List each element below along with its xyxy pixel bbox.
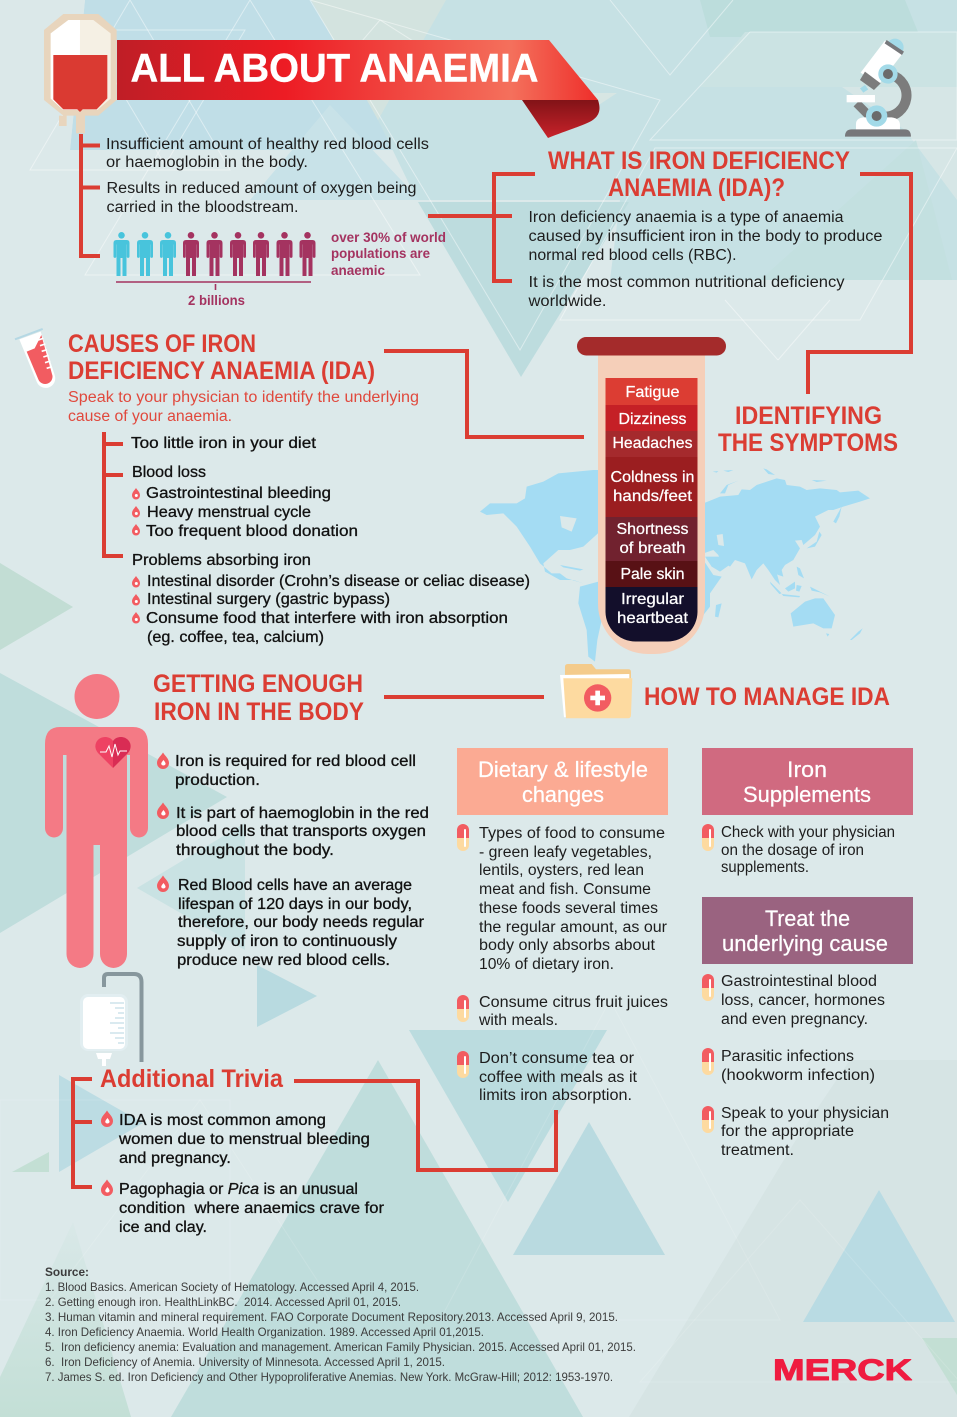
test tube of symptoms: Irregular [621, 591, 685, 608]
section: causes heading: Speak to your physician to identify the underlying [68, 389, 419, 406]
iron facts: throughout the body. [176, 842, 334, 859]
panel: dietary and lifestyle changes: 10% of dietary iron. [479, 956, 614, 973]
sources: 2. Getting enough iron. HealthLinkBC. 2014. Accessed April 01, 2015. [45, 1295, 401, 1309]
panel: dietary and lifestyle changes: the regular amount, as our [479, 919, 667, 936]
causes list: Too little iron in your diet [131, 435, 317, 452]
causes list [104, 432, 530, 646]
panel: iron supplements: supplements. [721, 859, 809, 876]
sources: 6. Iron Deficiency of Anemia. University of Minnesota. Accessed April 1, 2015. [45, 1355, 445, 1369]
test tube of symptoms: Coldness in [610, 469, 694, 486]
test tube of symptoms: hands/feet [613, 488, 693, 505]
iron facts: It is part of haemoglobin in the red [176, 805, 429, 822]
causes list: Heavy menstrual cycle [147, 504, 311, 521]
section: what is IDA [428, 147, 911, 394]
heading: identifying the symptoms: THE SYMPTOMS [718, 429, 898, 457]
panel: dietary and lifestyle changes: body only absorbs about [479, 937, 656, 954]
causes list: Too frequent blood donation [146, 523, 358, 540]
sources [45, 1265, 636, 1384]
panel: treat the underlying cause: Parasitic infections [721, 1048, 854, 1065]
test tube of symptoms [577, 337, 726, 654]
intro bracket and facts: Results in reduced amount of oxygen being [106, 180, 416, 197]
causes list: Blood loss [132, 464, 206, 481]
panel: iron supplements: on the dosage of iron [721, 842, 864, 859]
heading: identifying the symptoms: IDENTIFYING [735, 402, 882, 430]
section: additional trivia: women due to menstrual bleeding [118, 1131, 370, 1148]
iron facts: lifespan of 120 days in our body, [178, 896, 412, 913]
panel: treat the underlying cause: loss, cancer, hormones [721, 992, 885, 1009]
sources: Source: [45, 1265, 89, 1279]
panel: treat the underlying cause: underlying cause [722, 931, 888, 956]
iron facts [157, 752, 429, 969]
heading: getting enough iron: GETTING ENOUGH [153, 670, 363, 698]
panel: iron supplements: Check with your physician [721, 824, 895, 841]
panel: dietary and lifestyle changes: with meals. [478, 1012, 558, 1029]
test tube of symptoms: heartbeat [617, 610, 689, 627]
panel: dietary and lifestyle changes: changes [522, 782, 604, 807]
intro bracket and facts: Insufficient amount of healthy red blood cells [106, 136, 429, 153]
section: additional trivia: condition where anaemics crave for [119, 1200, 384, 1217]
panel: dietary and lifestyle changes: Dietary & lifestyle [478, 757, 648, 782]
section: additional trivia: and pregnancy. [119, 1150, 231, 1167]
section: what is IDA: WHAT IS IRON DEFICIENCY [548, 147, 850, 175]
panel: treat the underlying cause: Treat the [765, 906, 850, 931]
panel: dietary and lifestyle changes: Types of food to consume [479, 825, 665, 842]
icon: microscope [845, 39, 911, 137]
sources: 1. Blood Basics. American Society of Hematology. Accessed April 4, 2015. [45, 1280, 419, 1294]
heading: identifying the symptoms [718, 402, 898, 457]
iron facts: blood cells that transports oxygen [176, 823, 426, 840]
test tube of symptoms: Pale skin [620, 566, 684, 583]
heading: getting enough iron: IRON IN THE BODY [154, 698, 364, 726]
causes list: Problems absorbing iron [132, 552, 311, 569]
pictogram: population share: over 30% of world [331, 230, 446, 245]
causes list: Consume food that interfere with iron absorption [146, 610, 508, 627]
panel: dietary and lifestyle changes: these foods several times [479, 900, 658, 917]
intro bracket and facts [81, 134, 429, 256]
panel: treat the underlying cause: (hookworm infection) [721, 1067, 875, 1084]
iron facts: Red Blood cells have an average [178, 877, 412, 894]
section: what is IDA: Iron deficiency anaemia is a type of anaemia [528, 209, 844, 226]
section: additional trivia: IDA is most common among [119, 1112, 326, 1129]
panel: dietary and lifestyle changes [457, 748, 668, 1104]
test tube of symptoms: Dizziness [618, 411, 686, 428]
section: what is IDA: worldwide. [527, 293, 606, 310]
icon: IV bag [80, 974, 142, 1066]
iron facts: produce new red blood cells. [177, 952, 390, 969]
icon: blood bag [44, 14, 117, 133]
section: additional trivia: Pagophagia or Pica is an unusual [119, 1181, 358, 1198]
sources: 5. Iron deficiency anemia: Evaluation and management. American Family Physician. 2015. Accessed April 01, 2015. [45, 1340, 636, 1354]
panel: treat the underlying cause: Speak to your physician [721, 1105, 889, 1122]
iron facts: supply of iron to continuously [177, 933, 397, 950]
causes list: Intestinal surgery (gastric bypass) [147, 591, 390, 608]
section: causes heading: CAUSES OF IRON [68, 330, 256, 358]
section: causes heading: cause of your anaemia. [68, 408, 232, 425]
panel: iron supplements: Iron [787, 757, 827, 782]
test tube of symptoms: Headaches [612, 435, 692, 452]
panel: dietary and lifestyle changes: Don’t consume tea or [479, 1050, 634, 1067]
panel: treat the underlying cause [702, 897, 913, 1159]
panel: dietary and lifestyle changes: lentils, oysters, red lean [479, 862, 644, 879]
section: what is IDA: It is the most common nutritional deficiency [528, 274, 845, 291]
section: additional trivia: Additional Trivia [100, 1065, 284, 1093]
panel: dietary and lifestyle changes: meat and fish. Consume [479, 881, 651, 898]
section: what is IDA: normal red blood cells (RBC). [528, 247, 736, 264]
sources: 7. James S. ed. Iron Deficiency and Other Hypoproliferative Anemias. New York. McGraw-Hill; 2012: 1953-1970. [45, 1370, 613, 1384]
heading: getting enough iron [153, 670, 544, 726]
icon: test tube [15, 329, 55, 388]
panel: dietary and lifestyle changes: limits iron absorption. [479, 1087, 632, 1104]
panel: iron supplements [702, 748, 913, 876]
title banner: ALL ABOUT ANAEMIA [130, 46, 538, 90]
panel: dietary and lifestyle changes: Consume citrus fruit juices [479, 994, 668, 1011]
section: what is IDA: caused by insufficient iron in the body to produce [528, 228, 882, 245]
iron facts: therefore, our body needs regular [178, 914, 424, 931]
iron facts: production. [175, 772, 260, 789]
panel: treat the underlying cause: Gastrointestinal blood [721, 973, 877, 990]
panel: dietary and lifestyle changes: coffee with meals as it [479, 1069, 638, 1086]
sources: 4. Iron Deficiency Anaemia. World Health Organization. 1989. Accessed April 01,2015. [45, 1325, 484, 1339]
intro bracket and facts: carried in the bloodstream. [106, 199, 298, 216]
causes list: (eg. coffee, tea, calcium) [147, 629, 324, 646]
causes list: Intestinal disorder (Crohn’s disease or celiac disease) [147, 573, 530, 590]
intro bracket and facts: or haemoglobin in the body. [106, 154, 308, 171]
test tube of symptoms: of breath [620, 540, 686, 557]
human figure with heart [45, 674, 148, 968]
panel: treat the underlying cause: for the appropriate [721, 1123, 854, 1140]
world map [480, 468, 870, 662]
panel: treat the underlying cause: treatment. [721, 1142, 794, 1159]
panel: iron supplements: Supplements [743, 782, 871, 807]
pictogram: population share: 2 billions [188, 293, 245, 308]
pictogram: population share: populations are [331, 246, 430, 261]
section: causes heading [68, 330, 584, 437]
section: what is IDA: ANAEMIA (IDA)? [608, 174, 785, 202]
logo: Merck: MERCK [773, 1354, 912, 1387]
causes list: Gastrointestinal bleeding [146, 485, 331, 502]
section: additional trivia [73, 1065, 556, 1236]
icon: folder [560, 664, 632, 718]
section: causes heading: DEFICIENCY ANAEMIA (IDA) [68, 357, 375, 385]
section: additional trivia: ice and clay. [119, 1219, 207, 1236]
panel: treat the underlying cause: and even pregnancy. [721, 1011, 868, 1028]
pictogram: population share: anaemic [331, 263, 385, 278]
title banner [117, 40, 599, 138]
iron facts: Iron is required for red blood cell [175, 753, 416, 770]
test tube of symptoms: Fatigue [626, 384, 680, 401]
sources: 3. Human vitamin and mineral requirement. FAO Corporate Document Repository.2013. Accessed April 9, 2015. [45, 1310, 618, 1324]
heading: how to manage IDA: HOW TO MANAGE IDA [644, 683, 890, 711]
test tube of symptoms: Shortness [616, 521, 688, 538]
pictogram: population share [114, 230, 446, 308]
panel: dietary and lifestyle changes: - green leafy vegetables, [479, 844, 652, 861]
